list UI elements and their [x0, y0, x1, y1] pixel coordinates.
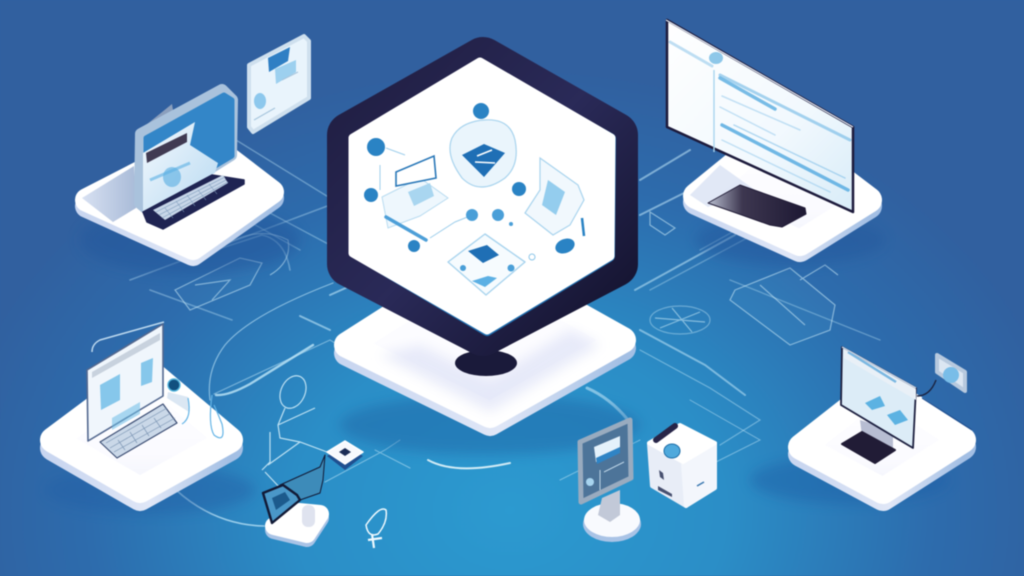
- small tablet: bottom centre: [580, 420, 641, 542]
- central hexagon white panel: [353, 62, 611, 330]
- monitor stand: top-right: [708, 185, 806, 227]
- cube device: [649, 425, 715, 506]
- monitor stand: bottom-right: [842, 420, 895, 463]
- platform: bottom-right: [750, 385, 963, 504]
- platform: bottom-left: [45, 370, 255, 514]
- platform: top-right: [690, 130, 885, 265]
- icon: top bubble: [450, 103, 516, 187]
- central base platform: [340, 260, 640, 455]
- stick figure sketch: [262, 372, 335, 490]
- central hexagon frame: [350, 60, 615, 333]
- icon: connector dots: [466, 209, 513, 226]
- laptop: top-left: [140, 90, 244, 229]
- floating card: bottom-right: [917, 355, 972, 430]
- icon: bottom diamond: [448, 234, 535, 295]
- monitor: top-right: [666, 20, 853, 212]
- platform: top-left: [80, 140, 300, 274]
- network connection lines: [130, 140, 880, 526]
- sketch glyph bottom centre: [366, 509, 386, 548]
- icon: right card: [512, 158, 584, 256]
- chip: small square: [327, 441, 363, 470]
- small device: bottom left: [263, 455, 325, 538]
- laptop: bottom-left: [87, 322, 223, 458]
- faint floating outlines: right: [650, 212, 850, 345]
- hexagon stand foot: [455, 350, 517, 376]
- panel icons inside hexagon: [364, 103, 584, 295]
- floating card: top-left: [249, 36, 309, 132]
- monitor: bottom-right: [841, 347, 916, 448]
- icon: left laptop: [364, 138, 470, 252]
- faint floating outlines: left: [175, 234, 289, 310]
